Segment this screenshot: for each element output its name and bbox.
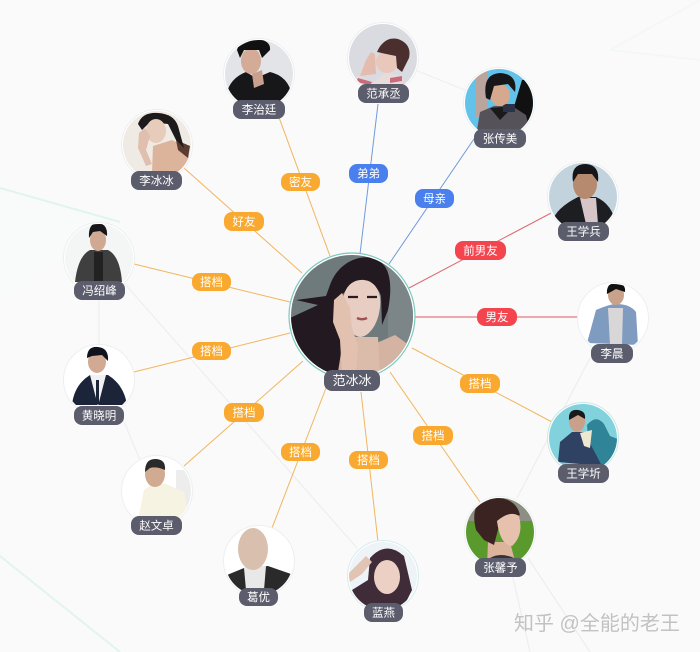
node: 赵文卓 — [122, 456, 192, 535]
relationship label: 搭档 lower right: 搭档 — [422, 428, 444, 442]
name pill: 范承丞: 范承丞 — [366, 86, 401, 100]
node: 张馨予 — [464, 496, 536, 577]
relationship label: 搭档 left lower — [192, 342, 231, 360]
name pill: 李晨: 李晨 — [600, 346, 624, 360]
relationship label: 搭档 right — [460, 374, 500, 393]
name pill: 葛优: 葛优 — [247, 591, 270, 604]
relationship label: 弟弟: 弟弟 — [357, 168, 380, 180]
relationship label: 弟弟 — [349, 164, 388, 183]
relationship label: 男友 — [477, 308, 517, 326]
relationship label: 搭档 bottom left: 搭档 — [289, 445, 312, 459]
relationship label: 母亲: 母亲 — [423, 192, 446, 206]
name pill: 王学圻: 王学圻 — [566, 466, 601, 480]
node: 李治廷 — [224, 38, 294, 119]
relationship label: 前男友: 前男友 — [463, 244, 498, 258]
node: 蓝燕 — [348, 540, 418, 622]
relationship label: 搭档 lower left: 搭档 — [232, 406, 256, 420]
name pill: 张传美: 张传美 — [483, 132, 518, 146]
node: 李冰冰 — [122, 110, 192, 190]
relationship label: 密友: 密友 — [289, 175, 312, 189]
name pill: 王学兵: 王学兵 — [566, 224, 601, 238]
relationship label: 好友: 好友 — [232, 214, 256, 228]
central node: 范冰冰 — [289, 253, 416, 391]
relationship label: 好友 — [224, 212, 264, 231]
node: 冯绍峰 — [64, 222, 134, 300]
relationship lines — [134, 104, 578, 542]
relationship label: 搭档 left upper — [192, 273, 231, 291]
relationship label: 男友: 男友 — [486, 310, 509, 324]
node: 张传美 — [464, 68, 536, 148]
name pill: 冯绍峰: 冯绍峰 — [82, 284, 117, 298]
relationship label: 密友 — [281, 173, 320, 191]
node: 葛优 — [224, 526, 294, 606]
faint links between people — [99, 70, 590, 652]
node: 范承丞 — [348, 22, 418, 103]
node: 黄晓明 — [64, 344, 134, 425]
relationship label: 母亲 — [415, 189, 454, 208]
name pill: 黄晓明: 黄晓明 — [82, 408, 116, 422]
node: 王学兵 — [548, 162, 618, 241]
relationship label: 搭档 left lower: 搭档 — [200, 344, 223, 358]
relationship label: 搭档 lower right — [413, 426, 453, 445]
name pill: 赵文卓: 赵文卓 — [139, 518, 174, 532]
relationship label: 搭档 bottom right — [349, 451, 388, 469]
name pill: 李治廷: 李治廷 — [242, 102, 277, 116]
relationship label: 前男友 — [455, 241, 506, 260]
relationship label: 搭档 lower left — [224, 403, 264, 422]
watermark: 知乎 @全能的老王 — [514, 612, 680, 635]
name pill: 范冰冰: 范冰冰 — [332, 373, 372, 388]
name pill: 张馨予: 张馨予 — [483, 560, 518, 574]
node: 李晨 — [578, 282, 648, 363]
node: 王学圻 — [548, 402, 620, 483]
name pill: 蓝燕: 蓝燕 — [372, 606, 395, 620]
relationship label: 搭档 right: 搭档 — [468, 376, 492, 390]
relationship label: 搭档 bottom left — [281, 443, 320, 461]
relationship label: 搭档 left upper: 搭档 — [200, 275, 223, 289]
name pill: 李冰冰: 李冰冰 — [139, 174, 174, 188]
relationship label: 搭档 bottom right: 搭档 — [357, 453, 380, 467]
